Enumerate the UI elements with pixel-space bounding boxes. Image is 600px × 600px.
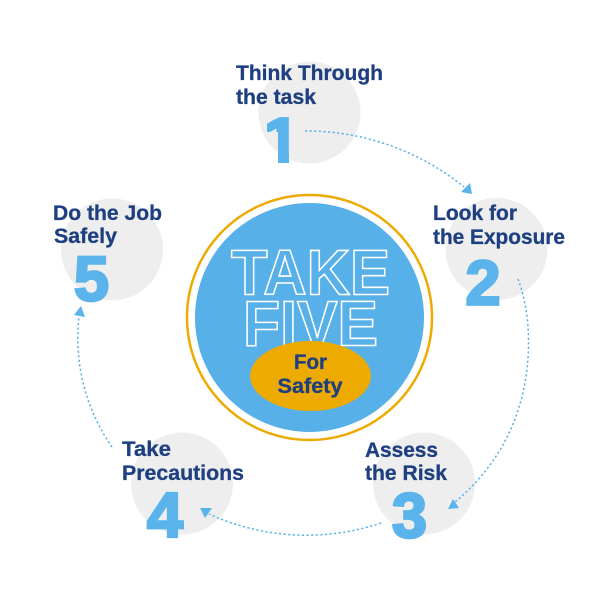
gold ellipse: For Safety: Safety bbox=[278, 375, 343, 398]
step 5: do the job safely: 5 bbox=[74, 244, 109, 314]
panel: center badge bbox=[187, 195, 432, 440]
arrow: step 2 to step 3 bbox=[448, 279, 529, 509]
gold ellipse: For Safety bbox=[250, 341, 371, 411]
step 2: look for the exposure bbox=[433, 198, 565, 318]
step 3: assess the risk: the Risk bbox=[365, 461, 447, 485]
heading: TAKE FIVE: FIVE bbox=[243, 287, 378, 359]
step 2: look for the exposure: Look for bbox=[433, 201, 518, 225]
heading: TAKE FIVE bbox=[231, 236, 390, 359]
step 4: take precautions bbox=[122, 432, 244, 551]
step 1: think through the task: the task bbox=[236, 85, 316, 109]
arrow: step 3 to step 4 bbox=[200, 508, 381, 535]
arrow: step 1 to step 2 bbox=[305, 131, 472, 194]
step 1: think through the task: 1 bbox=[262, 106, 300, 176]
arrow: step 4 to step 5 bbox=[74, 306, 112, 447]
step 3: assess the risk bbox=[365, 432, 475, 552]
step 1: think through the task: Think Through bbox=[236, 61, 383, 85]
step 5: do the job safely bbox=[53, 198, 163, 314]
gold ellipse: For Safety: For bbox=[294, 351, 327, 374]
infographic: take five for safety cycle bbox=[54, 62, 564, 540]
blue disc bbox=[195, 203, 424, 432]
step 1: think through the task bbox=[236, 62, 382, 164]
heading: TAKE FIVE: TAKE bbox=[231, 236, 390, 308]
step 3: assess the risk: Assess bbox=[365, 438, 438, 462]
step 2: look for the exposure: the Exposure bbox=[433, 225, 565, 249]
step 4: take precautions: Take bbox=[122, 437, 171, 461]
step 4: take precautions: Precautions bbox=[122, 461, 244, 485]
gold ring bbox=[187, 195, 432, 440]
step 5: do the job safely: Do the Job bbox=[53, 201, 162, 225]
step 2: look for the exposure: 2 bbox=[466, 248, 500, 318]
step 4: take precautions: 4 bbox=[147, 481, 183, 551]
step 3: assess the risk: 3 bbox=[392, 482, 427, 552]
step 5: do the job safely: Safely bbox=[54, 224, 117, 248]
